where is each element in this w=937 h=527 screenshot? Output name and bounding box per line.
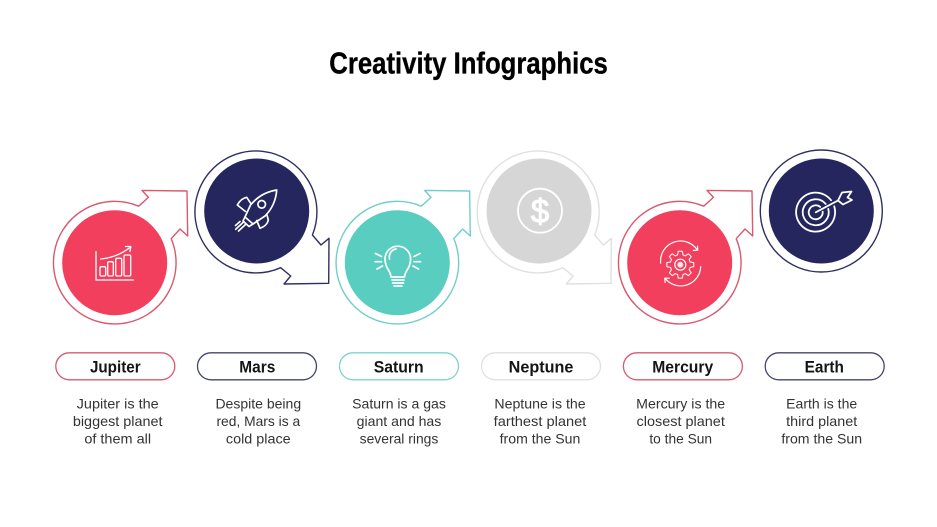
arrow outline: Jupiter	[53, 190, 188, 324]
icon: rocket	[236, 190, 277, 231]
description: Mars	[215, 396, 301, 447]
step: Earth graphic	[760, 150, 882, 272]
pill label: Jupiter	[56, 353, 175, 380]
title: Creativity Infographics	[329, 46, 608, 80]
description: Earth: Earth is the	[786, 396, 857, 412]
disc: Mars	[204, 158, 309, 264]
pill label: Mercury	[623, 353, 742, 380]
disc: Saturn	[345, 210, 450, 315]
description: Saturn	[352, 396, 446, 447]
description: Jupiter: Jupiter is the	[77, 396, 159, 412]
description: Neptune: Neptune is the	[494, 396, 586, 412]
disc: Neptune	[486, 158, 592, 264]
description: Mercury: Mercury is the	[636, 396, 725, 412]
description: Neptune: from the Sun	[500, 431, 580, 447]
step: Jupiter graphic	[53, 190, 188, 324]
description: Mercury	[636, 396, 725, 447]
arrow outline: Saturn	[336, 190, 470, 324]
pill label: Mercury: Mercury	[652, 359, 714, 377]
ring outline: Earth	[760, 150, 882, 272]
description: Jupiter: of them all	[84, 431, 151, 447]
pill label: Earth: Earth	[805, 359, 844, 377]
pill label: Jupiter: Jupiter	[90, 359, 141, 377]
step: Neptune graphic	[477, 151, 611, 284]
description: Mercury: to the Sun	[649, 431, 712, 447]
description: Earth: from the Sun	[781, 431, 862, 447]
description: Earth: third planet	[786, 413, 857, 429]
icon: dollar coin: $	[531, 192, 549, 230]
step: Mars graphic	[195, 151, 329, 284]
description: Neptune: farthest planet	[494, 413, 586, 429]
description: Mars: red, Mars is a	[216, 413, 300, 429]
step: Mercury graphic	[618, 190, 753, 324]
pill label: Earth	[765, 353, 884, 380]
disc: Mercury	[627, 210, 732, 315]
disc: Jupiter	[62, 210, 167, 315]
step: Saturn graphic	[336, 190, 470, 324]
pill label: Mars	[198, 353, 316, 380]
icon: gear with cycle arrows	[661, 241, 701, 286]
pill label: Neptune	[482, 353, 600, 380]
icon: light bulb	[375, 246, 420, 286]
disc: Earth	[769, 158, 874, 264]
description: Mars: cold place	[226, 431, 291, 447]
description: Jupiter	[73, 396, 163, 447]
description: Neptune	[494, 396, 586, 447]
description: Mars: Despite being	[215, 396, 301, 412]
description: Saturn: several rings	[360, 431, 438, 447]
pill label: Neptune: Neptune	[509, 359, 573, 377]
arrow outline: Mars	[195, 151, 329, 284]
arrow outline: Mercury	[618, 190, 753, 324]
arrow outline: Neptune	[477, 151, 611, 284]
icon: target with dart	[796, 192, 852, 232]
pill label: Mars: Mars	[239, 359, 275, 377]
description: Earth	[781, 396, 862, 447]
description: Mercury: closest planet	[637, 413, 725, 429]
pill label: Saturn: Saturn	[374, 359, 424, 377]
description: Saturn: Saturn is a gas	[352, 396, 446, 412]
icon: bar chart	[96, 246, 133, 280]
pill label: Saturn	[340, 353, 458, 380]
description: Saturn: giant and has	[357, 413, 441, 429]
description: Jupiter: biggest planet	[73, 413, 163, 429]
